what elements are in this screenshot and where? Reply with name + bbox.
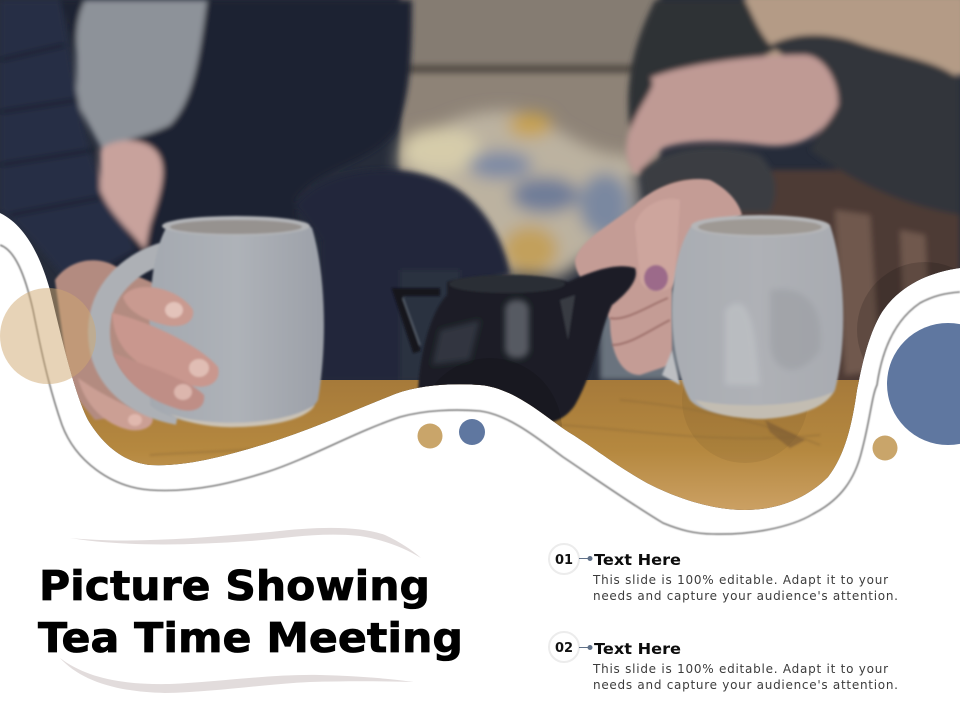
- swoosh above title: [70, 528, 421, 558]
- item 01: [549, 544, 898, 603]
- holding hand right: [575, 179, 742, 375]
- left hand and arm: [54, 258, 154, 432]
- circle: small tan centre: [418, 424, 442, 448]
- connector 01: [579, 556, 592, 561]
- blurred background wall and scarf: [395, 0, 660, 278]
- heading 02: Text Here: [594, 640, 681, 658]
- body 02: This slide is 100% editable. Adapt it to your: [592, 662, 888, 676]
- table: [73, 380, 859, 510]
- circle: small tan right: [872, 436, 898, 460]
- right person: [600, 0, 960, 385]
- number badge 02: 02: [555, 641, 573, 656]
- right mug: [662, 215, 843, 419]
- photo: tea time meeting: [0, 0, 960, 520]
- left hand fingers: [112, 287, 219, 426]
- circle: small blue centre: [459, 419, 485, 445]
- body 02: needs and capture your audience's attention.: [593, 678, 898, 692]
- translucent dark circles on photo: [418, 262, 960, 502]
- item 02: [549, 632, 898, 692]
- number badge 01: 01: [555, 553, 573, 568]
- circle: large tan translucent: [0, 288, 96, 384]
- connector 02: [579, 645, 592, 650]
- number badge 01: [549, 544, 579, 574]
- body 01: needs and capture your audience's attention.: [593, 589, 898, 603]
- heading 01: Text Here: [594, 551, 681, 569]
- number badge 02: [549, 632, 579, 662]
- title: Picture Showing: [39, 562, 430, 610]
- left person jacket: [0, 0, 514, 280]
- body 01: This slide is 100% editable. Adapt it to your: [592, 573, 888, 587]
- pitcher: [397, 266, 636, 423]
- swoosh below title: [60, 658, 414, 693]
- title: Tea Time Meeting: [38, 614, 463, 662]
- left mug: [99, 216, 324, 427]
- wave shadow line: [0, 245, 960, 534]
- circle: large blue: [887, 323, 960, 445]
